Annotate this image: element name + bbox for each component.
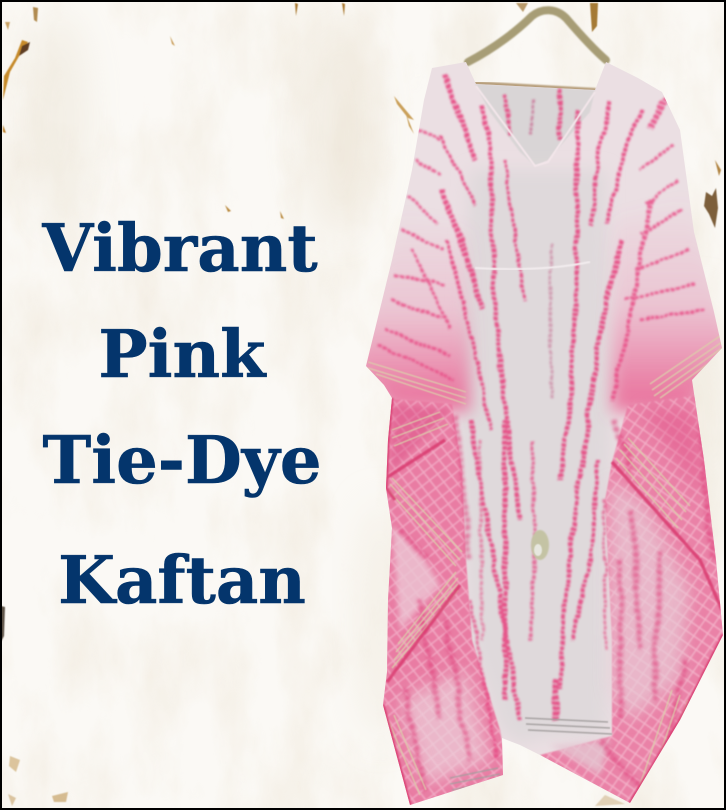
right drape — [540, 395, 726, 810]
inner neck back panel — [475, 84, 595, 166]
full silhouette — [366, 62, 722, 756]
title line 2: Pink — [98, 316, 267, 393]
red edge trims — [383, 398, 723, 805]
left drape — [383, 399, 503, 805]
title line 1: Vibrant — [41, 210, 318, 287]
left sleeve pink fade — [366, 242, 480, 422]
central panel — [458, 170, 612, 745]
hanger — [468, 10, 606, 90]
pendant tassel — [531, 530, 549, 560]
tie-dye stripes: sleeves — [378, 92, 705, 400]
tie-dye stripes: body — [440, 75, 643, 760]
tie-dye stripes: lower drapes — [400, 415, 712, 790]
waist drawstring — [475, 262, 590, 269]
clipped garment fabric — [350, 55, 726, 810]
title line 3: Tie-Dye — [42, 422, 322, 499]
title — [41, 210, 322, 619]
title line 4: Kaftan — [58, 542, 306, 619]
pale patches in drapes — [610, 480, 690, 720]
gold hem bands — [368, 336, 722, 795]
V neckline edge — [476, 86, 595, 166]
front placket — [538, 275, 542, 528]
right sleeve pink fade — [612, 195, 726, 412]
kaftan garment — [350, 55, 726, 810]
